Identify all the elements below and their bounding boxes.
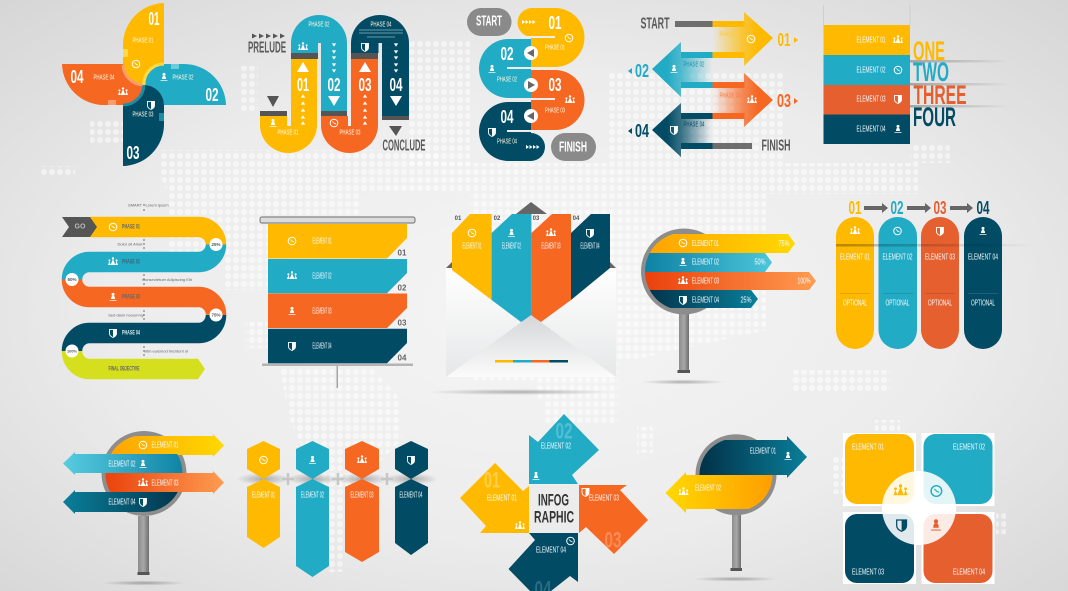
envelope body [446, 268, 616, 377]
card: element 04: ELEMENT 04 [580, 242, 600, 250]
magnifier ring [641, 228, 727, 314]
bar: element 02: ELEMENT 02 [856, 66, 886, 74]
bar: element 03 [824, 85, 910, 114]
magnifier handle [730, 515, 742, 571]
label: 01: 01 [148, 9, 160, 29]
segment: navy phase 04 [72, 315, 216, 351]
panel: serpentine timeline [62, 202, 222, 379]
center box [529, 485, 578, 533]
number 02 [628, 61, 649, 81]
icon: shield [148, 101, 154, 110]
text: CONCLUDE [382, 138, 426, 154]
arrow: element 03 orange: 03 [604, 528, 622, 552]
arrow: element 03 orange: ELEMENT 03 [589, 494, 619, 502]
bar: element 03: 100% [798, 276, 810, 286]
segment: orange phase 03 [72, 280, 216, 315]
icon: user [488, 65, 496, 73]
label: 02: 02 [500, 44, 514, 64]
label: start: START [640, 16, 670, 32]
bar: element 01: 75% [778, 239, 790, 248]
bar: element 01 [640, 234, 795, 253]
bar: element 02 [824, 55, 910, 85]
numbers row: 02 [890, 198, 904, 218]
label: phase 01: PHASE 01 [122, 224, 140, 230]
pill: element 01 [836, 217, 874, 349]
captions: nibh euismod tincidunt ut [144, 348, 189, 354]
word: two: TWO [913, 57, 949, 87]
wave segment: phase 03 orange [321, 59, 378, 153]
square: element 01: ELEMENT 01 [852, 442, 884, 452]
bar: element 02: 50% [754, 258, 766, 266]
label: 04: 04 [500, 107, 514, 127]
start pill [467, 8, 512, 36]
blade: phase 02 blue [144, 64, 226, 105]
panel: magnifier with four bars [640, 228, 816, 384]
banner: element 04: ELEMENT 04 [312, 342, 332, 350]
bar: element 01: ELEMENT 01 [856, 36, 886, 44]
panel: one two three four stack [824, 5, 1010, 144]
number 03: 03 [777, 91, 791, 111]
pill: element 02 [878, 217, 917, 349]
number 01: 01 [778, 30, 790, 50]
icon: people [118, 87, 128, 95]
icon: shield [110, 329, 116, 338]
pill: element 02: ELEMENT 02 [882, 252, 913, 262]
panel: start to finish snake [467, 8, 596, 161]
chevron: go [62, 217, 97, 237]
center box: INFOG [538, 490, 569, 510]
arrow: element 03 orange [579, 485, 648, 554]
icon: clock [109, 223, 117, 231]
bar: element 04 [640, 290, 758, 308]
segment: lime final objective [72, 351, 205, 379]
icon: people [108, 257, 118, 265]
card: element 04 [571, 214, 610, 300]
banner: element 03: ELEMENT 03 [312, 306, 332, 316]
bar: element 03 [640, 272, 816, 290]
label: phase 03: PHASE 03 [545, 108, 565, 114]
label: 01: 01 [548, 13, 562, 33]
pill: element 01: OPTIONAL [843, 298, 867, 308]
banner: element 01: ELEMENT 01 [312, 236, 332, 246]
arrows: navy chevrons [526, 145, 540, 149]
icon: clock [747, 35, 755, 43]
panel: four square quadrants [843, 433, 994, 584]
label: phase 04: PHASE 04 [94, 74, 115, 82]
icon: people [298, 42, 308, 50]
arrow: element 04: ELEMENT 04 [108, 498, 136, 506]
card: element 02: ELEMENT 02 [502, 242, 521, 250]
card: element 03: ELEMENT 03 [542, 242, 561, 250]
icon: people [747, 95, 757, 103]
icon: clock [132, 60, 140, 68]
column: element 04: ELEMENT 04 [400, 490, 423, 500]
label: phase 04: PHASE 04 [497, 138, 517, 146]
pill: element 03 [921, 217, 959, 349]
captions: Consectetuer Adipiscing Elit [142, 277, 193, 282]
panel: pinwheel infographic [62, 3, 226, 166]
bar: element 04 [824, 114, 910, 144]
numbers: 01 [455, 216, 462, 222]
arrow: element 02 [63, 452, 190, 475]
icon: people [894, 484, 908, 495]
small triangles [301, 43, 398, 125]
color bar [495, 360, 568, 362]
square: element 01 [845, 434, 914, 504]
percent markers: 100% [67, 348, 77, 354]
panel: projector screen [260, 217, 415, 388]
label: phase 04: PHASE 04 [684, 122, 705, 128]
panel: four rounded pills [836, 198, 1036, 349]
segment: blue phase 02 [72, 244, 216, 280]
panel: prelude to conclude wave [248, 15, 426, 154]
label: phase 02: PHASE 02 [172, 74, 194, 82]
bar: element 03: ELEMENT 03 [692, 276, 719, 286]
percent markers: 75% [212, 312, 220, 318]
arrow: element 02 blue: 02 [556, 418, 572, 444]
label: phase 03: PHASE 03 [132, 112, 154, 118]
arrow: element 02: ELEMENT 02 [108, 460, 136, 468]
panel: magnifier with two arrows [666, 434, 807, 582]
numbers: 04 [573, 216, 580, 222]
label: start: START [476, 12, 502, 30]
arrow: down marker end [389, 126, 402, 136]
square: element 03: ELEMENT 03 [852, 568, 884, 576]
arrow: element 01 [695, 436, 807, 478]
arrow 01 yellow [712, 12, 773, 66]
blade: phase 04 orange [62, 64, 144, 105]
column: element 02 [296, 441, 329, 577]
banner: element 03: 03 [398, 318, 407, 328]
bar: element 04: ELEMENT 04 [692, 296, 719, 304]
segment: orange [531, 70, 584, 130]
label: phase 02: PHASE 02 [684, 62, 705, 68]
center box: RAPHIC [534, 508, 574, 526]
numbers row: 01 [848, 198, 862, 218]
numbers row [848, 198, 990, 218]
arrows: prelude markers [252, 34, 285, 38]
label: final objective: FINAL OBJECTIVE [108, 366, 140, 372]
column: element 03: ELEMENT 03 [350, 490, 374, 500]
arrow: element 01 yellow: ELEMENT 01 [487, 494, 517, 502]
bar: element 01 [824, 25, 910, 55]
icon: user [110, 293, 116, 301]
numbers: 03 [533, 216, 540, 222]
label: phase 02: PHASE 02 [122, 258, 140, 266]
arrow: element 02: ELEMENT 02 [695, 484, 721, 492]
arrow: element 04 [63, 490, 190, 514]
arrow: element 02 [666, 472, 780, 513]
square: element 04: ELEMENT 04 [953, 568, 985, 576]
captions: Sed diam nonummy [108, 312, 144, 318]
label: phase 04: PHASE 04 [122, 330, 140, 336]
white triangles [297, 62, 402, 106]
icon: shield [488, 128, 496, 136]
banner: element 01 [268, 224, 407, 258]
banner: element 04: 04 [398, 354, 407, 362]
magnifier handle [678, 314, 690, 373]
arrow 04 navy [652, 103, 712, 157]
word: four: FOUR [913, 102, 956, 132]
arrow 02 blue [652, 42, 712, 97]
segment: yellow phase 01 [90, 227, 216, 244]
pill: element 01: ELEMENT 01 [840, 252, 870, 262]
arrow: element 02 blue [529, 414, 599, 484]
label: phase 01: PHASE 01 [720, 32, 741, 38]
numbers row: 03 [934, 198, 946, 218]
arrow: element 01: ELEMENT 01 [750, 446, 776, 456]
label: phase 01: PHASE 01 [545, 44, 565, 52]
wave segment: phase 02 blue [291, 15, 347, 111]
arrows: yellow chevrons [522, 20, 536, 24]
arrow: element 03: ELEMENT 03 [152, 478, 179, 488]
card: element 02 [492, 214, 531, 322]
chevron: go: GO [75, 224, 86, 230]
pill: element 04: OPTIONAL [971, 298, 995, 308]
icon: clock [565, 34, 573, 42]
label: 03: 03 [126, 143, 140, 163]
panel: magnifier with side arrows [63, 431, 224, 586]
banner: element 04 [268, 329, 407, 363]
label: finish: FINISH [762, 138, 790, 154]
blade: phase 01 yellow [123, 3, 164, 85]
captions [108, 202, 193, 355]
arrow: element 04 navy [508, 533, 578, 591]
icon: shield [362, 43, 368, 52]
captions: SMART [128, 202, 143, 208]
magnifier handle [138, 516, 150, 575]
icon: user [670, 65, 678, 73]
label: finish: FINISH [559, 138, 587, 156]
column: element 01 [247, 441, 280, 548]
square: element 03 [845, 514, 914, 583]
label: phase 01: PHASE 01 [132, 38, 154, 44]
label: phase 02: PHASE 02 [308, 22, 330, 28]
wave segment: phase 01 yellow [260, 59, 317, 153]
column: element 02: ELEMENT 02 [301, 490, 324, 500]
pill: element 04: ELEMENT 04 [968, 252, 998, 262]
arrow: element 01: ELEMENT 01 [152, 440, 179, 450]
captions: Lorem ipsum [145, 202, 169, 208]
numbers: 02 [494, 216, 501, 222]
banner: element 02: 02 [398, 284, 407, 292]
icon: shield [897, 520, 906, 531]
arrow: element 01 [100, 434, 224, 457]
label: 02: 02 [206, 85, 218, 105]
label: 04: 04 [390, 75, 402, 95]
wave segment: phase 04 navy [351, 15, 409, 116]
finish pill [551, 133, 596, 161]
label: 03: 03 [358, 75, 372, 95]
magnifier ring [102, 431, 186, 516]
icon: user [160, 73, 168, 81]
icon: user [270, 119, 276, 127]
number 02: 02 [635, 61, 649, 81]
arrow: down marker start [267, 96, 279, 107]
number 04 [628, 121, 649, 141]
card: element 01 [452, 214, 492, 300]
square: element 02: ELEMENT 02 [953, 442, 985, 452]
label: 01: 01 [297, 75, 309, 95]
label: 04: 04 [70, 67, 84, 87]
card: element 01: ELEMENT 01 [462, 242, 482, 250]
icon: clock [330, 119, 338, 127]
center circle [882, 471, 956, 545]
text lines: phase 04 description [359, 30, 403, 37]
label: phase 01: PHASE 01 [278, 130, 299, 136]
bar: element 01: ELEMENT 01 [692, 239, 719, 248]
arrow 03 orange [712, 73, 773, 127]
finish bar [712, 143, 752, 149]
arrow: element 03 [100, 471, 224, 494]
icon: user [931, 519, 941, 530]
roller [260, 217, 415, 223]
banner: element 02 [268, 259, 407, 293]
icon: shield [670, 126, 678, 134]
square: element 02 [924, 434, 992, 504]
label: 03: 03 [548, 75, 562, 95]
banner: element 01: 01 [398, 248, 407, 258]
label: phase 03: PHASE 03 [720, 92, 741, 100]
bar: element 03: ELEMENT 03 [856, 94, 886, 104]
blade: phase 03 navy [123, 85, 164, 166]
arrow: element 01 yellow [460, 463, 529, 533]
column: element 01: ELEMENT 01 [252, 490, 275, 500]
magnifier ring [696, 434, 776, 515]
percent markers: 25% [212, 242, 220, 247]
bar: element 04: ELEMENT 04 [856, 124, 886, 134]
column: element 03 [345, 441, 379, 562]
icon: people [565, 95, 575, 103]
label: phase 04: PHASE 04 [370, 22, 392, 28]
segment: blue [479, 39, 531, 98]
panel: prelude to conclude wave: PRELUDE [248, 40, 286, 56]
pill: element 03: OPTIONAL [928, 298, 952, 308]
panel: envelope [426, 202, 616, 395]
bar: element 04: 25% [740, 296, 752, 304]
column: element 04 [395, 441, 428, 555]
label: phase 03: PHASE 03 [340, 130, 361, 136]
arrow: element 02 blue: ELEMENT 02 [541, 442, 571, 450]
arrows between numbers [864, 203, 973, 213]
percent markers: 50% [68, 277, 76, 282]
number 04: 04 [635, 121, 649, 141]
panel: bent arrows [628, 12, 798, 157]
numbers row: 04 [976, 198, 990, 218]
pill: element 02: OPTIONAL [886, 298, 910, 308]
square: element 04 [924, 514, 992, 583]
envelope flap [446, 315, 616, 377]
arrow: element 01 yellow: 01 [484, 468, 500, 492]
icon: clock [931, 486, 942, 496]
base bar and stand [262, 364, 413, 388]
banner: element 03 [268, 294, 407, 328]
plus signs [282, 473, 393, 485]
pill: element 03: ELEMENT 03 [925, 252, 955, 262]
word: three: THREE [914, 80, 966, 110]
start bar [675, 21, 712, 27]
bar: element 02 [640, 253, 772, 272]
direction buttons [524, 46, 538, 123]
label: phase 02: PHASE 02 [497, 76, 517, 84]
percent markers [66, 238, 222, 358]
banner: element 02: ELEMENT 02 [312, 272, 332, 280]
panel: hexagon columns [236, 441, 438, 577]
label: phase 03: PHASE 03 [122, 294, 140, 300]
arrow: element 04 navy: ELEMENT 04 [536, 546, 566, 554]
numbers [455, 216, 580, 222]
bar: element 02: ELEMENT 02 [692, 258, 719, 266]
card: element 03 [531, 214, 571, 322]
captions: Dolor sit Amet [118, 242, 143, 246]
pill: element 04 [964, 217, 1002, 349]
label: 02: 02 [328, 75, 340, 95]
triangles behind envelope [446, 202, 616, 272]
word: one: ONE [913, 36, 945, 66]
segment: navy [479, 102, 545, 161]
segment: yellow [518, 8, 584, 67]
panel: infographic arrows [460, 414, 648, 591]
